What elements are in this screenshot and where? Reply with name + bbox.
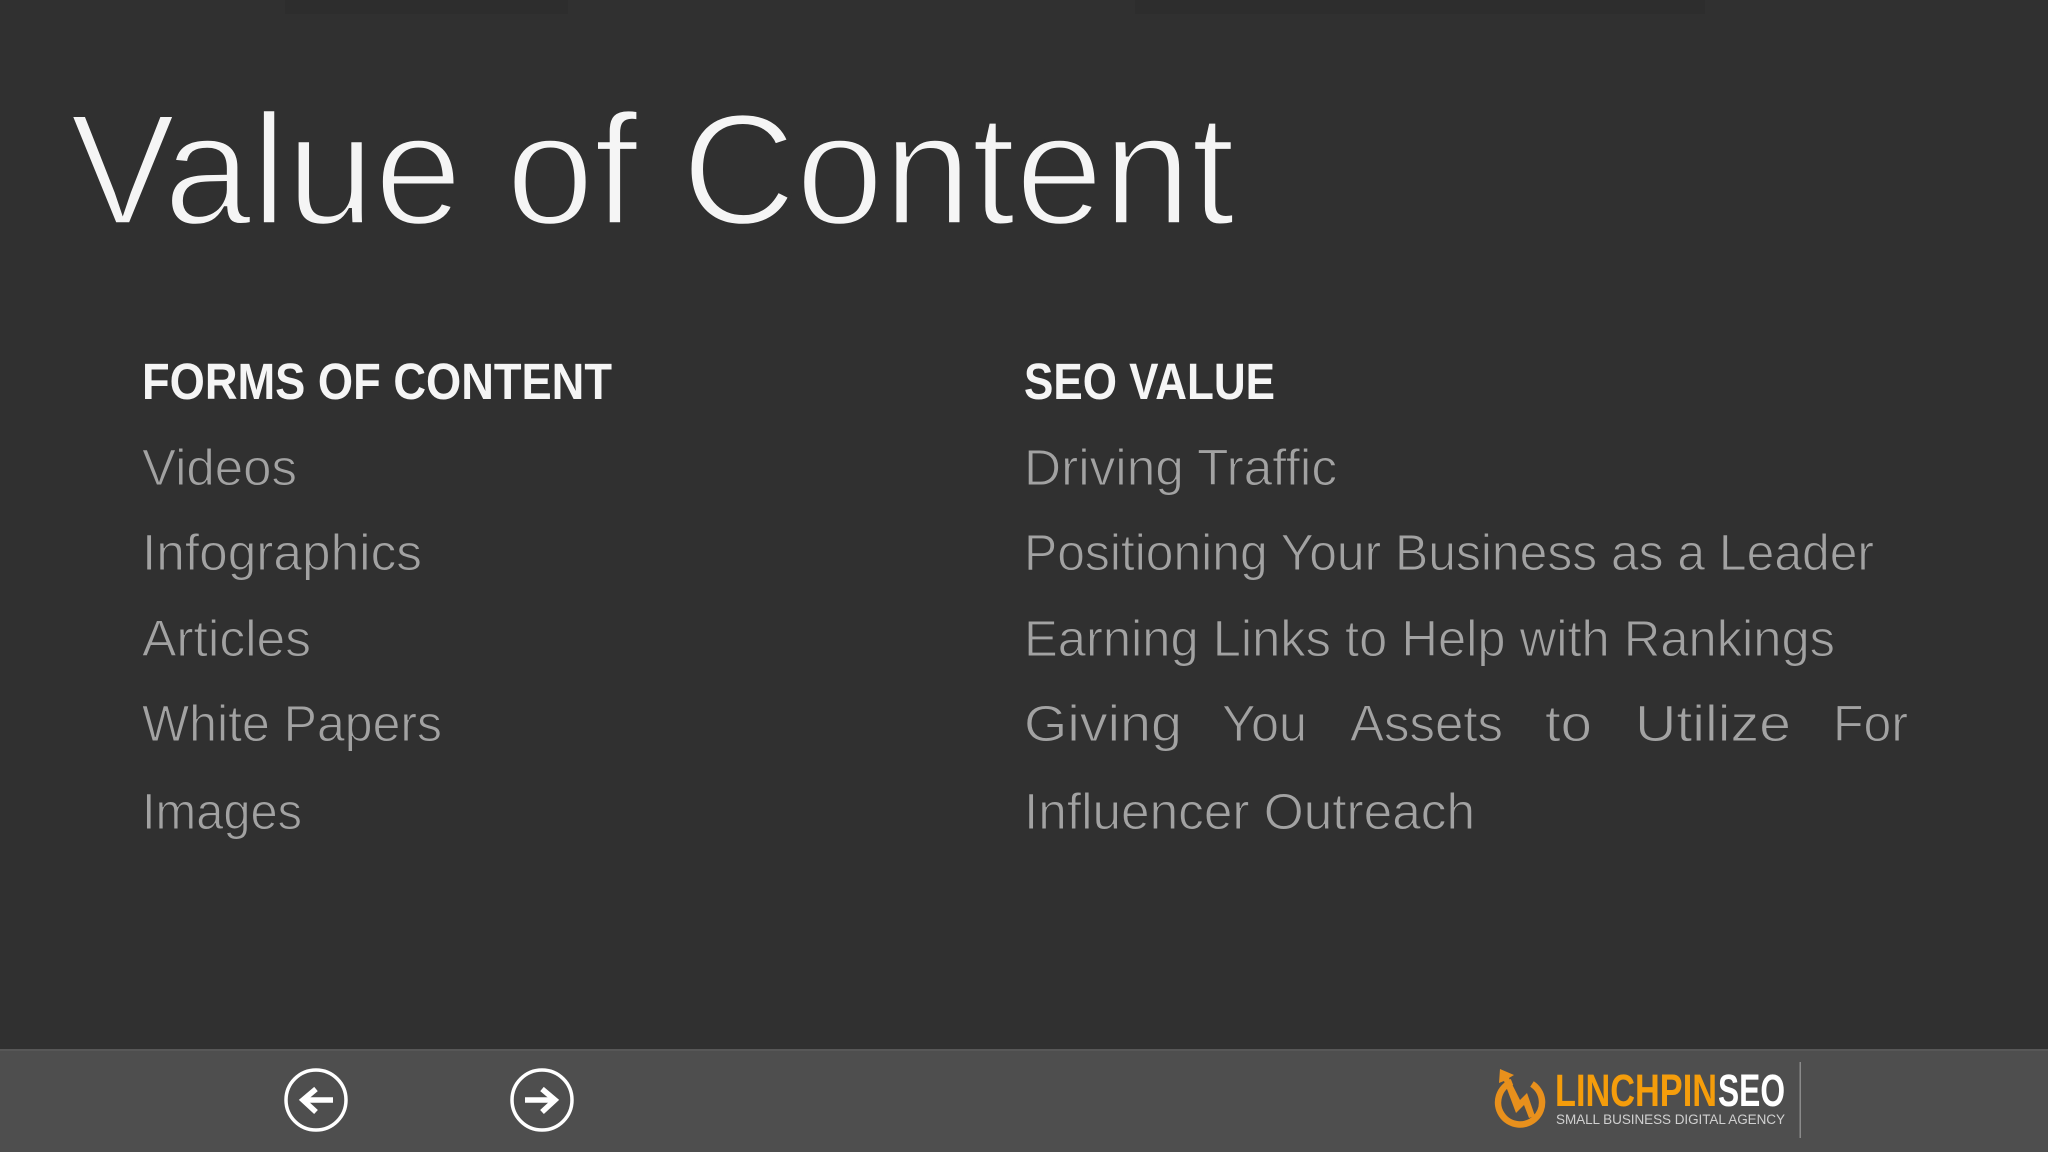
list item: giving assets, justified line: to bbox=[1545, 695, 1592, 752]
list item: images: Images bbox=[142, 783, 302, 840]
list item: white papers: White Papers bbox=[142, 695, 442, 752]
logo wordmark: LINCHPIN bbox=[1555, 1065, 1717, 1116]
heading: forms of content: FORMS OF CONTENT bbox=[142, 353, 612, 410]
list item: infographics: Infographics bbox=[142, 524, 422, 581]
list item: driving traffic: Driving Traffic bbox=[1024, 439, 1337, 496]
list item: giving assets, justified line: Assets bbox=[1350, 695, 1503, 752]
list item: giving assets, justified line: Utilize bbox=[1635, 695, 1791, 752]
logo wordmark accent: SEO bbox=[1718, 1065, 1785, 1116]
icon: back arrow bbox=[286, 1070, 346, 1130]
panel: forms of content bbox=[142, 353, 612, 840]
icon: logo circle and bolt bbox=[1498, 1069, 1542, 1124]
heading: seo value: SEO VALUE bbox=[1024, 353, 1275, 410]
list item: giving assets, justified line bbox=[1024, 695, 1908, 752]
logo: linchpin seo bbox=[1498, 1065, 1785, 1127]
icon: forward arrow bbox=[512, 1070, 572, 1130]
list item: articles: Articles bbox=[142, 610, 311, 667]
list item: giving assets, justified line: You bbox=[1222, 695, 1307, 752]
list item: positioning: Positioning Your Business as a Leader bbox=[1024, 524, 1874, 581]
title: Value of Content bbox=[70, 82, 1235, 258]
list item: influencer outreach: Influencer Outreach bbox=[1024, 783, 1475, 840]
logo tagline: SMALL BUSINESS DIGITAL AGENCY bbox=[1556, 1112, 1785, 1127]
panel: seo value bbox=[1024, 353, 1908, 840]
footer bar bbox=[0, 1049, 2048, 1152]
list item: giving assets, justified line: For bbox=[1833, 695, 1908, 752]
list item: earning links: Earning Links to Help with Rankings bbox=[1024, 610, 1835, 667]
list item: giving assets, justified line: Giving bbox=[1024, 695, 1182, 752]
list item: videos: Videos bbox=[142, 439, 297, 496]
